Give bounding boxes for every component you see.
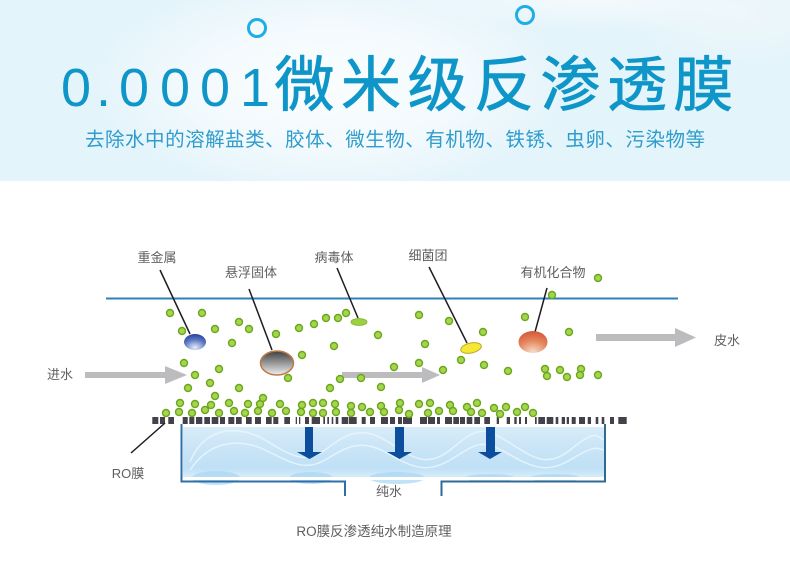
diagram labels: 病毒体 <box>314 250 354 265</box>
tank frame right <box>442 424 605 496</box>
diagram labels: 细菌团 <box>408 248 448 263</box>
green contaminant dots <box>162 274 602 418</box>
title: 微米级反渗透膜 <box>274 52 734 119</box>
subtitle: 去除水中的溶解盐类、胶体、微生物、有机物、铁锈、虫卵、污染物等 <box>85 129 705 151</box>
particles <box>184 318 548 375</box>
diagram labels <box>47 248 740 539</box>
RO membrane <box>152 417 627 424</box>
diagram labels: RO膜 <box>112 466 144 481</box>
diagram labels: RO膜反渗透纯水制造原理 <box>296 524 452 539</box>
diagram labels: 进水 <box>47 367 73 382</box>
gray flow arrows <box>85 328 696 384</box>
water tank <box>183 427 604 485</box>
title <box>61 52 734 119</box>
diagram labels: 重金属 <box>137 250 177 265</box>
diagram labels: 皮水 <box>714 333 740 348</box>
tank frame left <box>182 424 345 496</box>
diagram labels: 纯水 <box>376 484 402 499</box>
diagram labels: 有机化合物 <box>520 265 586 280</box>
icon: bubble right <box>516 6 534 24</box>
title: 0.0001 <box>61 58 270 118</box>
icon: bubble left <box>248 20 266 36</box>
panel: header banner <box>0 0 790 181</box>
leader lines <box>131 267 547 453</box>
blue down arrows <box>297 427 502 459</box>
diagram labels: 悬浮固体 <box>225 265 277 280</box>
top boundary line <box>106 298 678 300</box>
